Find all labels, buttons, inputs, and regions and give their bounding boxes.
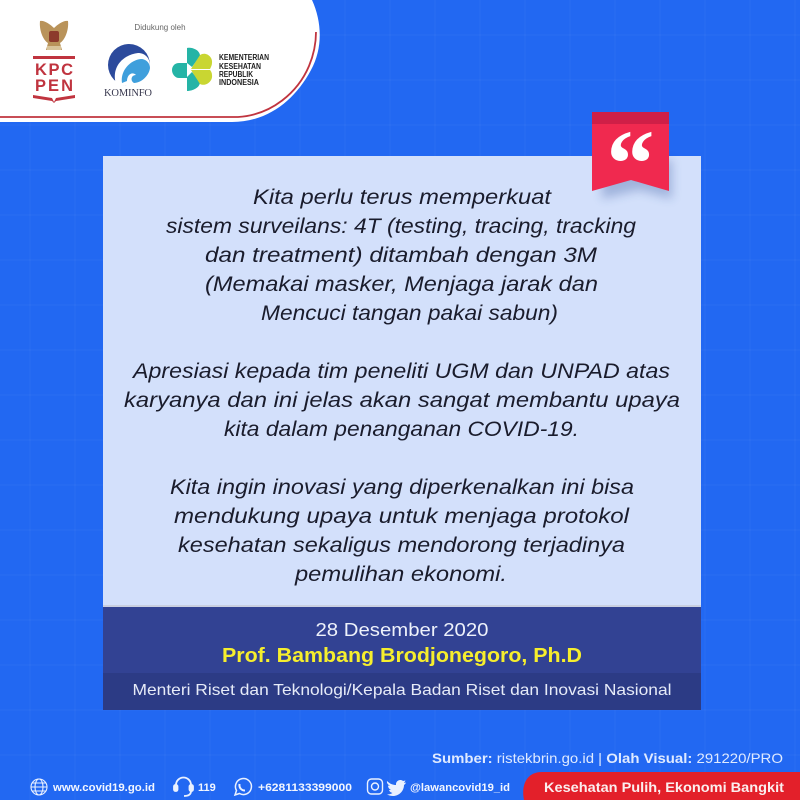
footer: contact bar	[31, 772, 800, 800]
text block: second paragraph: kita dalam penanganan COVID-19.	[224, 418, 579, 441]
icon: quote ribbon: “	[606, 110, 654, 217]
text: date: 28 Desember 2020	[316, 620, 488, 640]
icon: Garuda emblem	[40, 21, 68, 50]
text: Didukung oleh: Didukung oleh	[134, 23, 186, 32]
icon: twitter	[387, 780, 406, 796]
logo: KPC PEN: KPC	[35, 61, 73, 79]
logo: Kementerian Kesehatan: INDONESIA	[219, 78, 259, 87]
text block: first paragraph: sistem surveilans: 4T (testing, tracing, tracking	[166, 215, 636, 238]
text block: first paragraph: Mencuci tangan pakai sabun)	[261, 302, 558, 325]
text block: second paragraph: karyanya dan ini jelas akan sangat membantu upaya	[124, 389, 680, 412]
logo: Kementerian Kesehatan	[172, 48, 269, 91]
icon: headset	[174, 778, 193, 796]
text block: third paragraph: kesehatan sekaligus mendorong terjadinya	[178, 534, 625, 557]
text block: first paragraph: dan treatment) ditambah dengan 3M	[205, 244, 598, 267]
text: source credit: Sumber: ristekbrin.go.id | Olah Visual: 291220/PRO	[432, 750, 783, 766]
panel: speaker attribution	[103, 607, 701, 710]
icon: instagram	[368, 779, 382, 794]
banner: slogan: Kesehatan Pulih, Ekonomi Bangkit	[544, 779, 784, 795]
logo: Kominfo: KOMINFO	[104, 88, 152, 99]
text block: third paragraph: Kita ingin inovasi yang diperkenalkan ini bisa	[170, 476, 634, 499]
text: social handle: @lawancovid19_id	[410, 782, 510, 794]
logo: Kementerian Kesehatan: REPUBLIK	[219, 70, 253, 79]
icon: globe	[31, 779, 47, 795]
text block: second paragraph: Apresiasi kepada tim peneliti UGM dan UNPAD atas	[131, 360, 671, 383]
logo: KPC PEN	[33, 56, 75, 103]
text block: second paragraph	[124, 360, 680, 441]
icon: whatsapp	[235, 779, 251, 795]
logo: KPC PEN: PEN	[35, 77, 73, 95]
logo: Kementerian Kesehatan: KEMENTERIAN	[219, 53, 269, 62]
text block: third paragraph	[170, 476, 634, 586]
text block: first paragraph: (Memakai masker, Menjaga jarak dan	[205, 273, 598, 296]
panel: quote card	[103, 156, 701, 607]
text: phone: +6281133399000	[258, 782, 352, 794]
icon: quote ribbon	[592, 110, 672, 217]
header: white logo panel	[0, 0, 320, 122]
text block: third paragraph: pemulihan ekonomi.	[294, 563, 507, 586]
logo: Kementerian Kesehatan: KESEHATAN	[219, 62, 261, 71]
text block: first paragraph	[166, 186, 636, 325]
logo: Kominfo	[104, 44, 152, 99]
text: speaker name: Prof. Bambang Brodjonegoro, Ph.D	[222, 645, 582, 667]
text: hotline: 119	[198, 782, 216, 794]
text block: third paragraph: mendukung upaya untuk menjaga protokol	[174, 505, 631, 528]
text: speaker title: Menteri Riset dan Teknologi/Kepala Badan Riset dan Inovasi Nasional	[132, 682, 672, 699]
text block: first paragraph: Kita perlu terus memperkuat	[253, 186, 552, 209]
banner: slogan	[523, 772, 800, 800]
text: website: www.covid19.go.id	[52, 782, 155, 794]
